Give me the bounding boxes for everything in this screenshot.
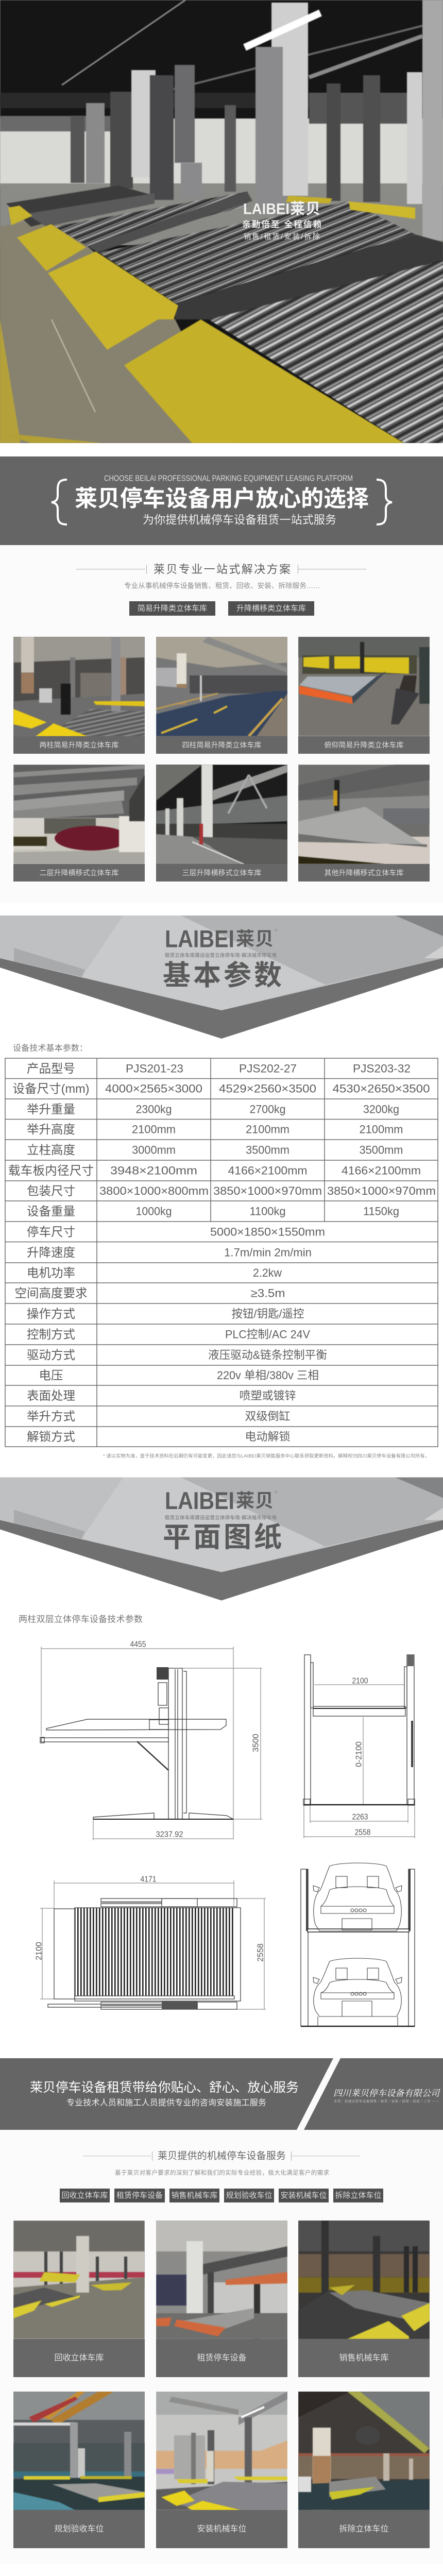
banner: basic parameters: 租赁立体车库建设运营立体停车场·解决城市停车难: [165, 952, 277, 958]
card: other: [298, 765, 430, 882]
parameter table: 3850×1000×970mm: [213, 1184, 322, 1197]
card: recycle: 回收立体车库: [54, 2353, 104, 2363]
parameter table: 液压驱动&链条控制平衡: [208, 1349, 327, 1361]
parameter table: PLC控制/AC 24V: [225, 1328, 310, 1341]
drawing: plan view: [35, 1875, 266, 2009]
parameter table: 1000kg: [136, 1205, 172, 1218]
drawing: plan view: 2558: [257, 1943, 265, 1962]
service buttons: 安装机械车位: [280, 2191, 327, 2200]
drawing: side elevation: 3237.92: [156, 1830, 183, 1839]
parameter table: 2100mm: [132, 1123, 176, 1136]
parameter table: 载车板内径尺寸: [8, 1164, 94, 1177]
section heading: solutions: 莱贝专业一站式解决方案: [154, 563, 291, 576]
parameter table: 空间高度要求: [14, 1286, 88, 1300]
drawing: side elevation: 4455: [130, 1640, 146, 1649]
parameter table: 3800×1000×800mm: [99, 1184, 209, 1197]
card: lease: 租赁停车设备: [197, 2353, 247, 2363]
parameter table: 举升方式: [27, 1410, 75, 1423]
company name: 四川莱贝停车设备有限公司: [333, 2086, 440, 2099]
icon: left brace: [52, 480, 67, 524]
card: two layer: 二层升降横移式立体车库: [39, 869, 118, 877]
card: sale: [298, 2221, 430, 2377]
parameter table: 3000mm: [132, 1144, 176, 1156]
card: lease: [156, 2221, 287, 2377]
banner: service promise: 莱贝停车设备租赁带给你贴心、舒心、放心服务: [30, 2080, 299, 2095]
parameter table: 操作方式: [27, 1307, 75, 1320]
parameter table: 1100kg: [249, 1205, 285, 1218]
parameter table: 1.7m/min 2m/min: [224, 1246, 312, 1259]
card: install: [156, 2392, 287, 2548]
footnote: * 请以实物为准，鉴于技术资料在后期仍有可能变更，因此请您与LAIBEI莱贝销售服务中心联系获取更新资料。解释权归四川莱贝停车设备有限公司所有。: [103, 1453, 430, 1459]
parameter table: 产品型号: [27, 1062, 75, 1075]
section heading: solutions: [76, 563, 366, 589]
drawing: plan view: 2100: [35, 1942, 43, 1960]
icon: hero logo: 亲勤倍至 全程信赖: [242, 219, 321, 229]
parameter table: 电机功率: [27, 1266, 75, 1280]
card: install: 安装机械车位: [197, 2524, 247, 2534]
card: tilting: [298, 637, 430, 754]
title: 莱贝停车设备用户放心的选择: [75, 486, 369, 511]
card: planning: [13, 2392, 145, 2548]
parameter table: 3948×2100mm: [110, 1164, 197, 1177]
card: two layer: [13, 765, 145, 882]
parameter table: 喷塑或镀锌: [239, 1389, 296, 1402]
drawing: front elevation: 2263: [352, 1812, 368, 1822]
icon: LAIBEI logo: ®: [275, 928, 278, 933]
banner: plan drawings: 租赁立体车库建设运营立体停车场·解决城市停车难: [165, 1515, 277, 1520]
button: simple lift: [129, 601, 215, 616]
parameter table: 举升高度: [27, 1123, 75, 1136]
service buttons: 规划验收车位: [226, 2191, 272, 2200]
parameter table: 电动解锁: [245, 1430, 291, 1443]
icon: LAIBEI logo: LAIBEI: [165, 1487, 234, 1514]
section heading: services: 莱贝提供的机械停车设备服务: [158, 2150, 286, 2162]
parameter table: ≥3.5m: [250, 1287, 285, 1299]
parameter table: 2.2kw: [253, 1266, 282, 1279]
parameter table: 3500mm: [246, 1144, 289, 1156]
drawing: two cars: [301, 1863, 415, 2026]
button: simple lift: 简易升降类立体车库: [138, 604, 207, 613]
banner: user choice: [0, 456, 443, 545]
car upper: [313, 1863, 402, 1931]
icon: LAIBEI logo: LAIBEI: [165, 925, 234, 952]
banner: service promise: [0, 2058, 443, 2130]
parameter table: 升降速度: [27, 1246, 75, 1259]
parameter table: 立柱高度: [27, 1143, 75, 1157]
heading: 平面图纸: [163, 1522, 282, 1553]
parameter table: 控制方式: [27, 1328, 75, 1341]
parameter table: PJS201-23: [126, 1062, 183, 1075]
icon: hero logo: 莱贝: [290, 200, 320, 217]
parameter table: 4529×2560×3500: [219, 1082, 316, 1095]
banner: service promise: 主营：机械式停车设备销售 / 租赁 / 安装 / 拆除 / 回收 / 二手 ——: [334, 2099, 439, 2103]
parameter table: 双级倒缸: [245, 1410, 291, 1423]
parameter table: 2100mm: [246, 1123, 289, 1136]
icon: right brace: [377, 480, 392, 524]
service buttons: 回收立体车库: [61, 2191, 108, 2200]
parameter table: 2300kg: [136, 1103, 172, 1116]
card: other: 其他升降横移式立体车库: [325, 869, 404, 877]
service buttons: 销售机械车库: [171, 2191, 218, 2200]
card: four post: 四柱简易升降类立体车库: [182, 741, 262, 749]
heading: 基本参数: [163, 960, 282, 991]
card: three layer: 三层升降横移式立体车库: [182, 869, 262, 877]
parameter table: 设备尺寸(mm): [12, 1082, 90, 1095]
parameter table: 停车尺寸: [27, 1225, 75, 1239]
drawing: plan view: 4171: [140, 1875, 157, 1884]
parameter table: 220v 单相/380v 三相: [217, 1369, 319, 1382]
card: four post: [156, 637, 287, 754]
parameter table: 4530×2650×3500: [333, 1082, 430, 1095]
card: two post: [13, 637, 145, 754]
parameter table: 设备重量: [27, 1205, 75, 1218]
card: recycle: [13, 2221, 145, 2377]
parameter table: PJS203-32: [353, 1062, 411, 1075]
parameter table: PJS202-27: [239, 1062, 297, 1075]
banner: basic parameters: [0, 916, 443, 1039]
section heading: services: [83, 2150, 360, 2176]
parameter table: 驱动方式: [27, 1348, 75, 1362]
card: tilting: 俯仰简易升降类立体车库: [325, 741, 404, 749]
section heading: services: 基于莱贝对客户要求的深刻了解和我们的实际专业经验，极大化满足客户的需求: [115, 2169, 330, 2176]
hero photo: [0, 0, 443, 443]
icon: LAIBEI logo: 莱贝: [236, 1490, 274, 1511]
parameter table: 解锁方式: [27, 1430, 75, 1444]
parameter table: 电压: [39, 1368, 63, 1382]
parameter table: 表面处理: [27, 1389, 75, 1402]
section heading: solutions: 专业从事机械停车设备销售、租赁、回收、安装、拆除服务……: [124, 581, 320, 589]
parameter table: 2700kg: [249, 1103, 285, 1116]
parameter table: 3200kg: [363, 1103, 399, 1116]
parameter table: 3850×1000×970mm: [327, 1184, 436, 1197]
card: dismantle: [298, 2392, 430, 2548]
drawing: side elevation: 3500: [251, 1734, 261, 1752]
car lower: [313, 1958, 402, 2026]
label: technical parameters: 设备技术基本参数：: [13, 1044, 88, 1053]
banner: service promise: 专业技术人员和施工人员提供专业的咨询安装施工服务: [66, 2098, 266, 2107]
parameter table: [5, 1058, 438, 1447]
parameter table: 2100mm: [360, 1123, 403, 1136]
card: dismantle: 拆除立体车位: [339, 2524, 389, 2534]
parameter table: 1150kg: [363, 1205, 399, 1218]
service buttons: 拆除立体车位: [335, 2191, 382, 2200]
label: drawing title: 两柱双层立体停车设备技术参数: [19, 1615, 143, 1624]
icon: hero logo: [242, 200, 321, 241]
parameter table: 包装尺寸: [27, 1184, 75, 1197]
parameter table: 4166×2100mm: [228, 1164, 307, 1177]
parameter table: 举升重量: [27, 1103, 75, 1116]
drawing: front elevation: 0-2100: [354, 1741, 364, 1767]
service buttons: 租赁停车设备: [116, 2191, 163, 2200]
card: two post: 两柱简易升降类立体车库: [39, 741, 118, 749]
icon: LAIBEI logo: 莱贝: [236, 928, 274, 949]
card: three layer: [156, 765, 287, 882]
parameter table: 4166×2100mm: [342, 1164, 421, 1177]
card: planning: 规划验收车位: [54, 2524, 104, 2534]
banner: plan drawings: [0, 1478, 443, 1600]
parameter table: 5000×1850×1550mm: [210, 1225, 325, 1239]
card: sale: 销售机械车库: [339, 2353, 389, 2363]
parameter table: 按钮/钥匙/遥控: [232, 1308, 304, 1320]
parameter table: 3500mm: [360, 1144, 403, 1156]
drawing: front elevation: [303, 1655, 415, 1838]
icon: hero logo: 销售/租赁/安装/拆除: [244, 232, 320, 241]
icon: hero logo: LAIBEI: [243, 201, 289, 217]
button: lift and slide: [228, 601, 314, 616]
service buttons: [60, 2189, 383, 2202]
drawing: side elevation: [40, 1640, 262, 1840]
banner: user choice: CHOOSE BEILAI PROFESSIONAL PARKING EQUIPMENT LEASING PLATFORM: [104, 474, 353, 483]
subtitle: 为你提供机械停车设备租赁一站式服务: [143, 513, 336, 527]
icon: LAIBEI logo: ®: [275, 1490, 278, 1495]
drawing: front elevation: 2558: [354, 1828, 371, 1837]
button: lift and slide: 升降横移类立体车库: [236, 604, 306, 613]
drawing: front elevation: 2100: [352, 1676, 368, 1686]
parameter table: 4000×2565×3000: [105, 1082, 202, 1095]
